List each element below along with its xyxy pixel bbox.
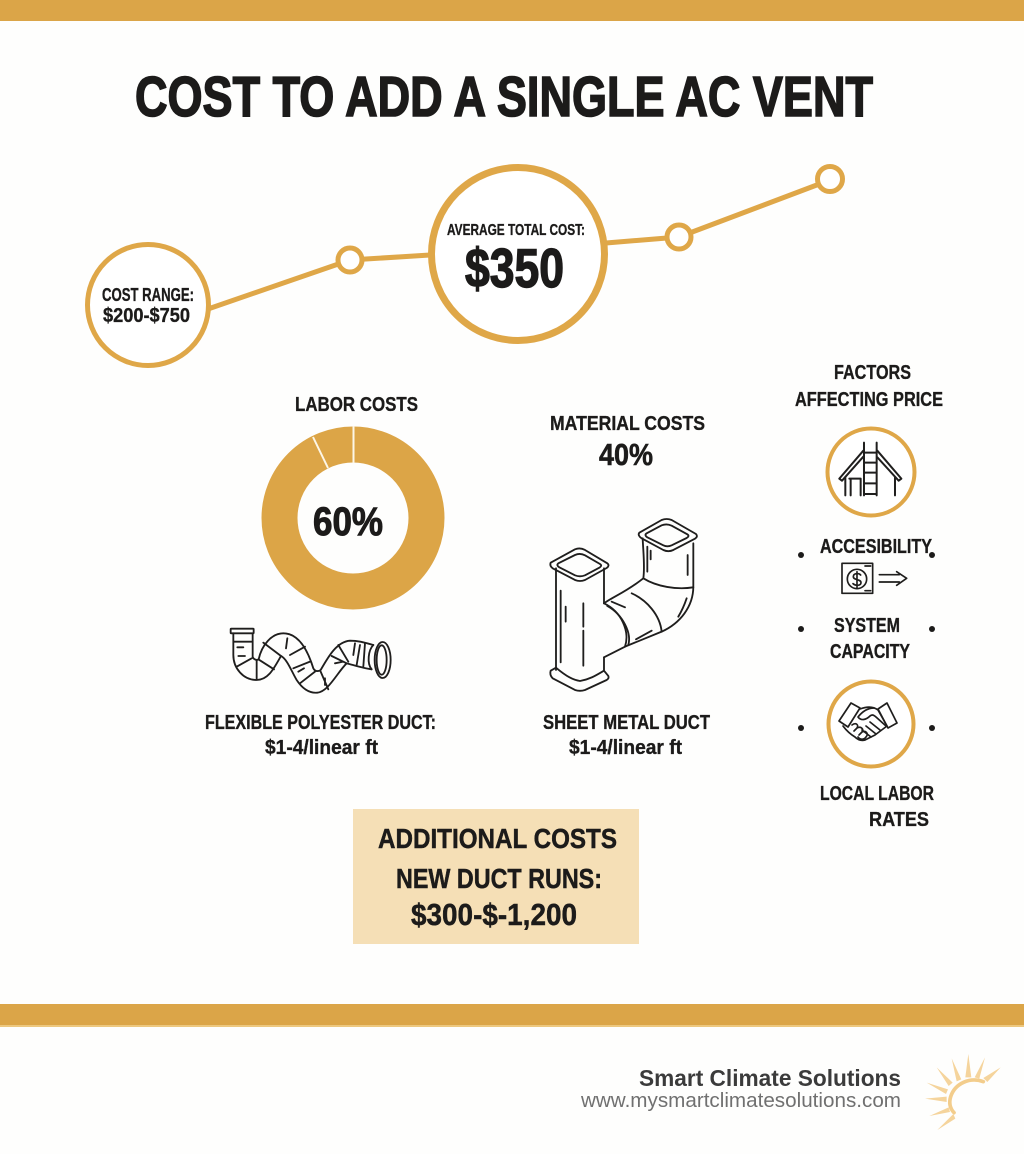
bottom banner bar <box>0 1004 1024 1027</box>
panel: factors affecting price <box>795 362 943 831</box>
callout: additional costs: NEW DUCT RUNS: <box>396 863 602 894</box>
icon: dollar unit with arrow <box>842 563 907 593</box>
donut chart <box>280 426 426 592</box>
label: flexible duct: FLEXIBLE POLYESTER DUCT: <box>205 712 436 734</box>
footer brand text: Smart Climate Solutions <box>639 1065 901 1091</box>
average total cost node: AVERAGE TOTAL COST: <box>447 222 585 239</box>
timeline marker <box>818 166 842 192</box>
heading: labor costs: LABOR COSTS <box>295 394 418 416</box>
label: accessibility: ACCESIBILITY <box>820 536 933 558</box>
heading: factors <box>795 362 943 411</box>
callout: additional costs: ADDITIONAL COSTS <box>378 823 617 854</box>
timeline line <box>208 255 430 309</box>
cost range node: COST RANGE: <box>102 285 194 305</box>
average total cost node <box>432 168 604 340</box>
cost timeline chart <box>88 166 842 366</box>
callout: additional costs: $300-$-1,200 <box>411 897 577 932</box>
panel: labor costs <box>205 394 436 759</box>
panel: material costs <box>543 413 710 759</box>
icon: house with ladder <box>828 428 914 516</box>
label: sheet metal duct: SHEET METAL DUCT <box>543 712 710 734</box>
icon: flexible duct <box>231 629 391 693</box>
percentage: material: 40% <box>599 437 653 472</box>
icon: handshake <box>828 682 914 766</box>
heading: material costs: MATERIAL COSTS <box>550 413 705 435</box>
label: system capacity: CAPACITY <box>830 641 911 663</box>
donut chart: 60% <box>313 500 383 544</box>
label: local labor rates <box>820 783 934 831</box>
bullet dots <box>798 552 935 731</box>
label: system capacity: SYSTEM <box>834 615 900 637</box>
icon: sheet metal duct <box>550 519 697 691</box>
footer brand text: www.mysmartclimatesolutions.com <box>580 1089 901 1112</box>
heading: factors: FACTORS <box>834 362 911 384</box>
price: sheet metal duct: $1-4/linear ft <box>569 737 682 759</box>
top banner bar <box>0 0 1024 21</box>
label: local labor rates: LOCAL LABOR <box>820 783 934 805</box>
heading: factors: AFFECTING PRICE <box>795 389 943 411</box>
label: system capacity <box>830 615 911 663</box>
cost range node <box>88 244 208 366</box>
cost range node: $200-$750 <box>103 305 190 327</box>
callout: additional costs <box>353 809 639 944</box>
timeline marker <box>667 225 691 249</box>
timeline marker <box>338 248 362 272</box>
average total cost node: $350 <box>465 237 564 299</box>
icon: sun logo <box>925 1054 1001 1130</box>
label: local labor rates: RATES <box>869 809 929 831</box>
price: flexible duct: $1-4/linear ft <box>265 737 378 759</box>
timeline line right <box>606 180 830 243</box>
footer brand text <box>580 1065 901 1112</box>
